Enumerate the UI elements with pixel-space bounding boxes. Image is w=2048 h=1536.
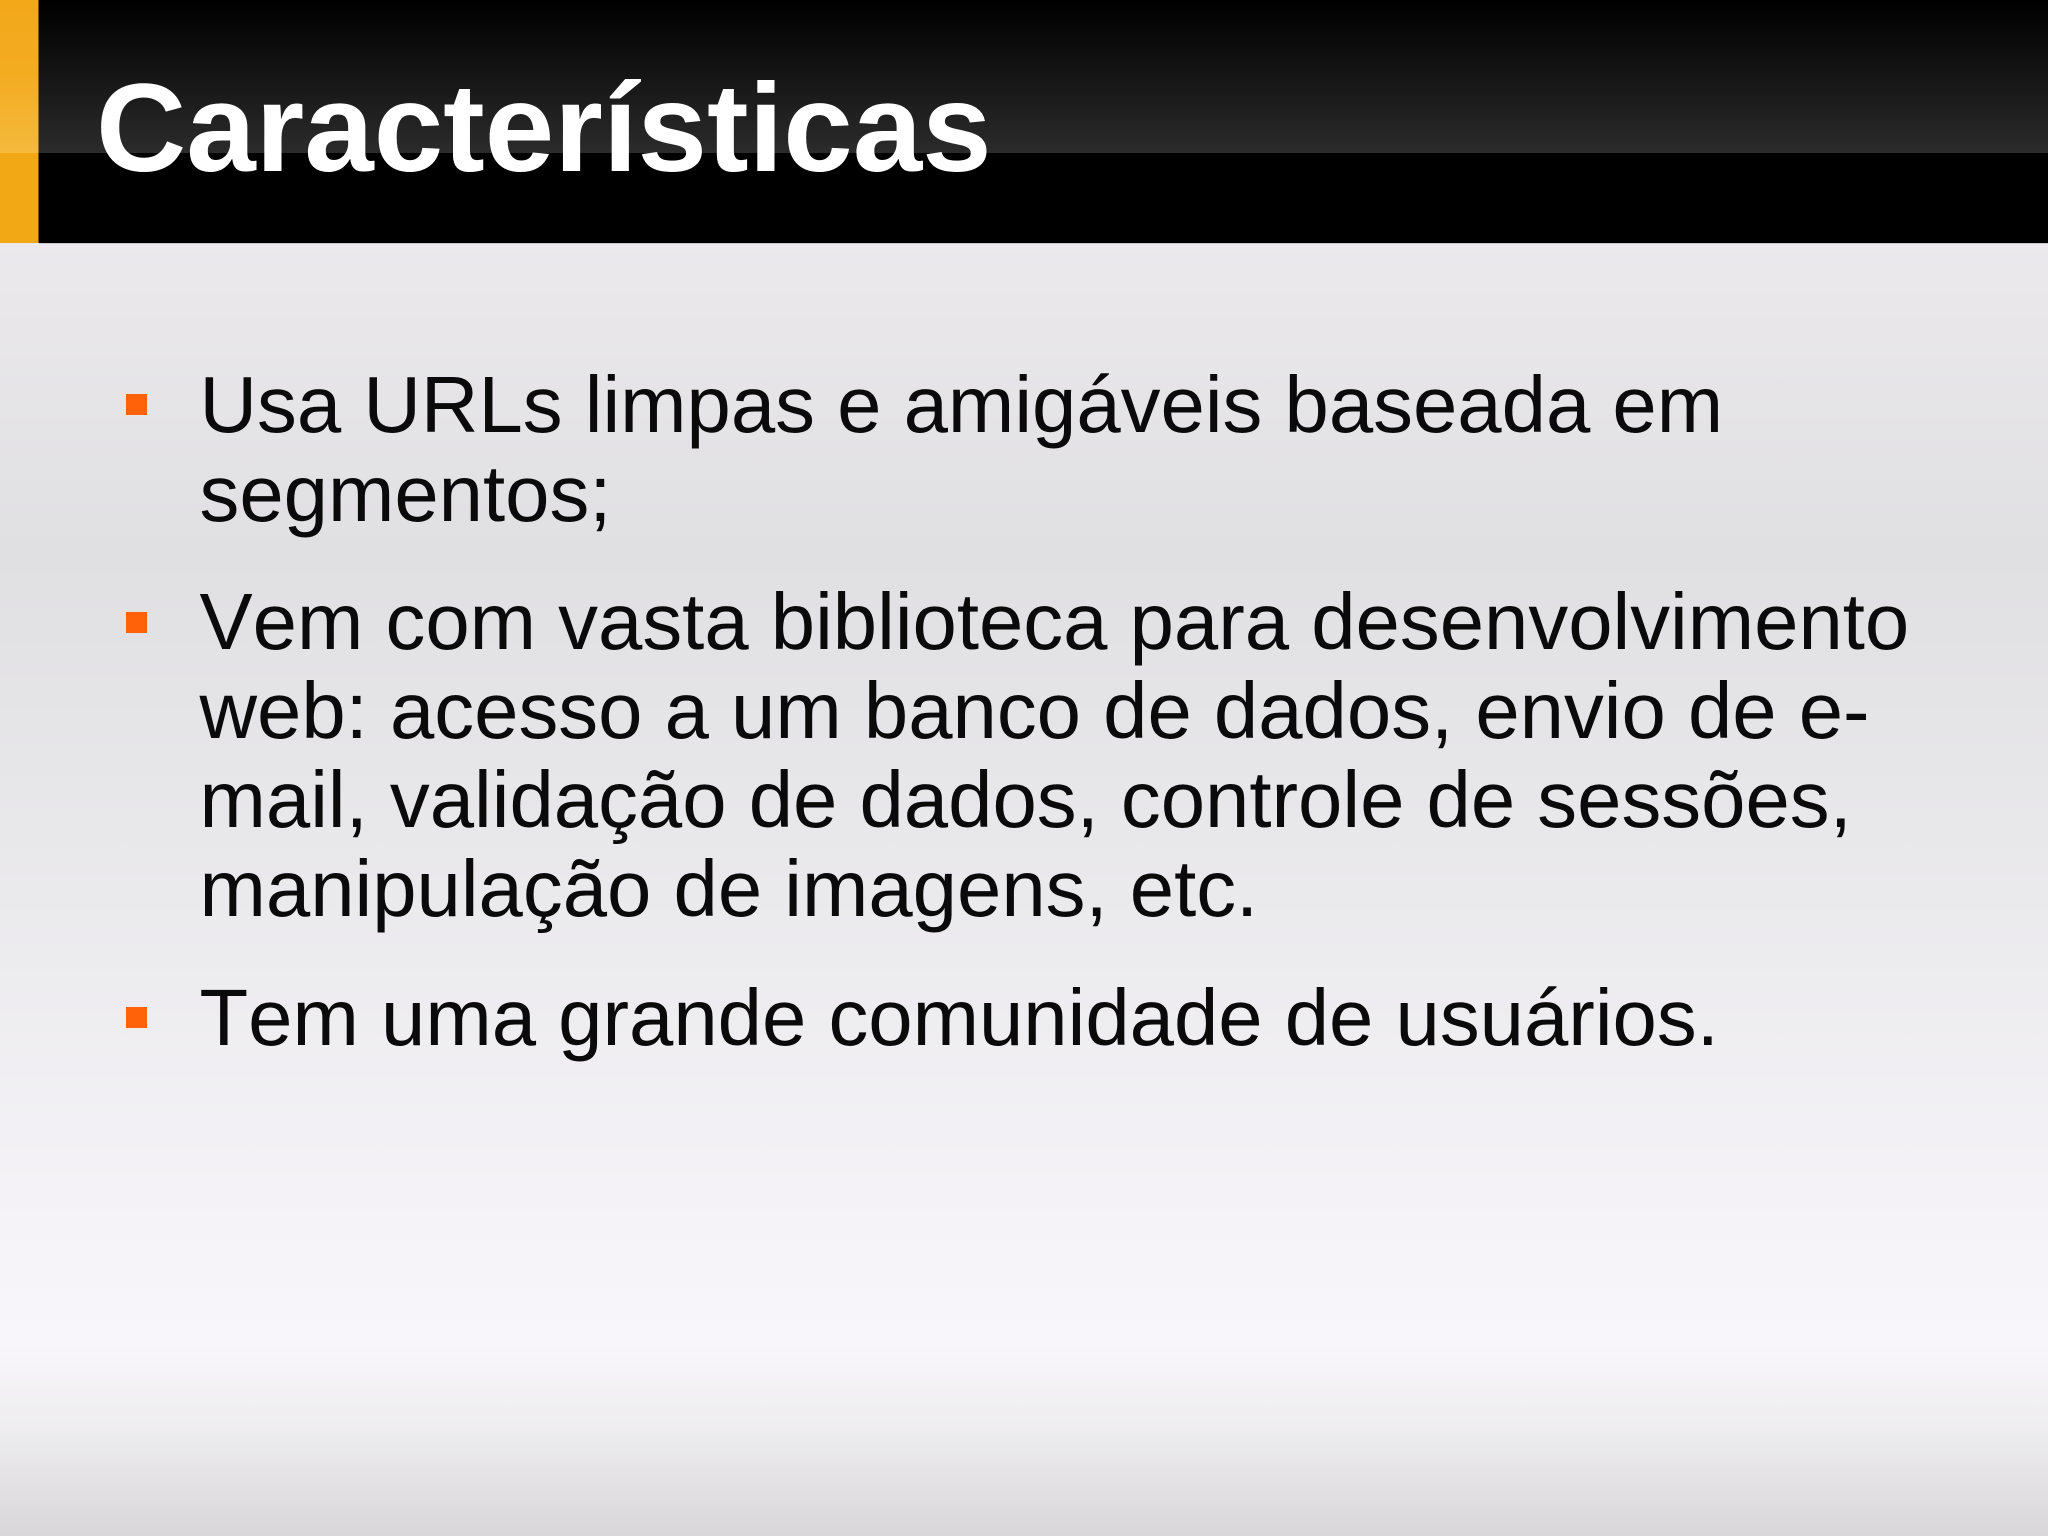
bullet text 2 — [198, 577, 1909, 933]
bullet text 2: Vem com vasta biblioteca para desenvolvimento — [200, 577, 1909, 666]
bullet point 1 — [126, 360, 1723, 538]
bullet text 2: mail, validação de dados, controle de sessões, — [200, 755, 1852, 844]
header band — [0, 0, 2048, 244]
bullet text 1: segmentos; — [200, 449, 611, 538]
bullet text 1: Usa URLs limpas e amigáveis baseada em — [200, 360, 1723, 449]
bullet text 2: web: acesso a um banco de dados, envio de e- — [198, 666, 1870, 755]
bullet text 1 — [200, 360, 1723, 538]
bullet text 2: manipulação de imagens, etc. — [200, 844, 1258, 933]
bullet point 2 — [126, 577, 1909, 933]
bullet point 3 — [126, 973, 1719, 1062]
bullet marker 3 — [126, 1007, 147, 1028]
bullet marker 1 — [126, 394, 147, 415]
bullet text 3: Tem uma grande comunidade de usuários. — [200, 973, 1719, 1062]
title: Características — [96, 59, 992, 198]
bullet marker 2 — [126, 612, 147, 633]
